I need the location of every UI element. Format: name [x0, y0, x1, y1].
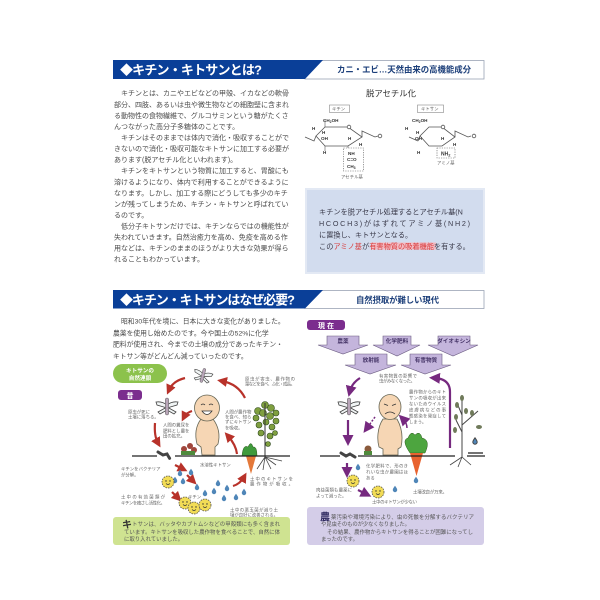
text block: chitin explanation: んつながった高分子多糖体のことです。 [114, 122, 239, 131]
figure: smiling person [194, 395, 220, 455]
chemical diagram: deacetylation: H [405, 126, 409, 131]
text block: change since showa 30: 肥料が使用され、今までの土壌の成分であったキチン・ [113, 340, 283, 348]
small captions: past cycle: を吸収。 [225, 424, 243, 432]
heading bar: what is chitin chitosan [113, 60, 484, 79]
label: natural chain pill [113, 364, 167, 383]
figure: sad person [378, 394, 402, 455]
callout: purple note: その結果、農作物からキトサンを得ることが困難になってし [327, 528, 473, 536]
icon: dragonfly [338, 398, 360, 415]
chemical diagram: deacetylation: アミノ基 [437, 160, 455, 166]
icon: flower and chitin chain [158, 443, 197, 459]
label: natural chain pill: キトサンの [126, 368, 154, 374]
small captions: past cycle: キチンを癒さし活性化。 [121, 500, 165, 506]
text block: chitin explanation: るのです。 [114, 212, 148, 220]
chemical diagram: deacetylation: 2 [330, 120, 332, 124]
illustration: green plant and carrot [242, 402, 282, 474]
small captions: past cycle: 水溶性キトサン [200, 462, 231, 468]
heading bar: what is chitin chitosan: カニ・エビ…天然由来の高機能成分 [337, 64, 472, 74]
chemical diagram: deacetylation: CH [412, 118, 419, 123]
callout: purple note: 薬汚染や環境汚染により、虫の死骸を分解するバクテリア [331, 513, 474, 521]
small captions: past cycle: 葉などを食べ、ふ化・成長。 [245, 380, 295, 388]
text block: chitin explanation: キチンはそのままでは体内で消化・吸収することがで [121, 133, 289, 142]
panel: why chitin is needed [113, 290, 485, 545]
small captions: past cycle: 肥料とし農を [163, 428, 189, 434]
label: natural chain pill: 自然連鎖 [129, 374, 152, 382]
text block: chitin explanation: ンが残ってしまうため、キチン・キトサンと呼ばれてい [114, 199, 288, 208]
text block: chitin explanation: 部分、四肢、あるいは虫や微生物などの細胞壁に含まれ [114, 100, 289, 109]
text block: chitin explanation: きないので消化・吸収可能なキトサンに加工する必要が [114, 144, 289, 153]
small captions: present [316, 372, 447, 506]
small captions: present: れいな虫か農園はほ [366, 468, 409, 476]
small captions: past cycle: ずにキトサン [225, 418, 252, 426]
chemical diagram: deacetylation: H [323, 150, 327, 155]
small captions: past cycle: 壌が良好に改善される。 [230, 512, 278, 518]
icon: yellow bacteria [162, 476, 211, 514]
flow arrows: pollutants: ダイオキシン [437, 337, 471, 345]
flow arrows: pollutants: 農薬 [337, 337, 349, 345]
chemical diagram: deacetylation: NH [348, 151, 355, 156]
small captions: past cycle: が分解。 [121, 472, 139, 478]
small captions: present: サンの吸収が出来 [409, 394, 447, 402]
callout: chitosan amino group: キチンを脱アセチル処理するとアセチル基(N [319, 208, 463, 216]
chemical diagram: deacetylation: 2 [448, 152, 451, 158]
small captions: past cycle: 原虫が害虫、農作物の [245, 376, 295, 382]
chemical diagram: deacetylation: 3 [354, 166, 356, 170]
small captions: past cycle: 土中のキトサンを [250, 476, 293, 482]
text block: chitin explanation [114, 89, 289, 264]
icon: water drops [173, 469, 246, 501]
heading bar: why needed [113, 290, 484, 308]
small captions: past cycle: 人間が農作物 [225, 408, 252, 416]
chemical diagram: deacetylation: H [417, 150, 421, 155]
small captions: past cycle: キチン [188, 494, 202, 500]
chemical diagram: deacetylation: OH [332, 118, 339, 123]
label: present tag: 現 在 [318, 321, 334, 330]
chemical diagram: deacetylation: 2 [419, 120, 421, 124]
flow arrows: pollutants: 放射能 [363, 356, 380, 364]
chemical diagram: deacetylation: H [348, 136, 352, 141]
chemical diagram: deacetylation: H [441, 136, 445, 141]
small captions: present: しまう。 [409, 420, 426, 426]
small captions: present: ある [366, 476, 375, 482]
small captions: past cycle: 土中の悪玉菌が減り土 [230, 506, 279, 514]
callout: purple note: 農 [320, 510, 330, 524]
text block: chitin explanation: 溶けるようになり、体内で利用することができるように [114, 177, 289, 186]
small captions: present: 肉益菌類も農薬に [316, 486, 352, 494]
small captions: present: 土中のキトサンが少ない [372, 498, 418, 506]
small captions: past cycle: 土壌に落ちる。 [128, 414, 159, 420]
heading bar: why needed: ◆キチン・キトサンはなぜ必要? [120, 292, 295, 308]
small captions: past cycle: 原虫が死に [128, 408, 150, 416]
text block: chitin explanation: れることもわかっています。 [114, 256, 204, 264]
illustration: past natural cycle [113, 364, 295, 518]
callout: chitosan amino group [306, 189, 484, 273]
icon: flower and chitin chain [341, 446, 372, 457]
text block: chitin explanation: 低分子キトサンだけでは、キチンならではの機能性が [121, 222, 289, 230]
text block: chitin explanation: る動物性の食物繊維で、グルコサミンという糖がたくさ [114, 111, 289, 120]
heading bar: what is chitin chitosan: ◆キチン・キトサンとは? [120, 62, 262, 78]
small captions: past cycle: 農作物が吸収。 [250, 480, 293, 488]
illustration: carrot [405, 433, 427, 476]
chemical diagram: deacetylation: H [453, 142, 457, 147]
small captions: present: 化学肥料で、形のき [366, 462, 408, 470]
small captions: present: 虫がみなくなった。 [379, 378, 415, 384]
flow arrows: pollutants: 化学肥料 [386, 337, 409, 345]
illustration: present situation [307, 320, 485, 506]
chemical diagram: deacetylation: アセチル基 [341, 174, 363, 180]
chemical diagram: deacetylation: OH [415, 136, 423, 141]
small captions: present: 農作物からのキト [409, 388, 446, 396]
text block: chitin explanation: あります(脱アセチル化といわれます)。 [114, 155, 237, 164]
small captions: past cycle: 土中の有効菌類が [121, 494, 166, 500]
text block: chitin explanation: キチンとは、カニやエビなどの甲殻、イカなどの軟骨 [121, 89, 289, 98]
callout: purple note: や昆虫そのものが少なくなりました。 [321, 520, 410, 528]
small captions: present: 皮膚病などの事 [409, 406, 447, 414]
chemical diagram: deacetylation: H [359, 142, 363, 147]
text block: chitin explanation: 用などは、キチンのままのほうがより大きな効果が得ら [114, 244, 289, 253]
text block: change since showa 30 [113, 316, 285, 360]
text block: chitin explanation: 失われていきます。自然治癒力を高め、免疫を高める作 [114, 233, 288, 242]
illustration: bare tree [450, 395, 483, 467]
callout: green note: トサンは、バッタやカブトムシなどの甲殻類にも多く含まれ [132, 520, 281, 528]
text block: chitin explanation: キチンをキトサンという物質に加工すると、胃酸にも [121, 166, 289, 175]
small captions: past cycle: を食べ、知ら [225, 414, 251, 420]
callout: chitosan amino group: HCOCH3)がはずれてアミノ基(NH2) [319, 219, 470, 228]
chemical diagram: deacetylation: H [322, 130, 326, 135]
small captions: present: よって減った。 [316, 492, 346, 500]
small captions: past cycle: キチンをバクテリア [121, 466, 161, 472]
chemical diagram: deacetylation: CH [323, 118, 330, 123]
chemical diagram: deacetylation: NH [441, 152, 448, 158]
heading bar: why needed: 自然摂取が難しい現代 [356, 295, 440, 305]
callout: chitosan amino group: このアミノ基が有害物質の吸着機能を有する。 [319, 242, 470, 251]
arrows: purple [347, 378, 450, 494]
callout: chitosan amino group: に置換し、キトサンとなる。 [319, 230, 412, 240]
ground line [132, 455, 290, 457]
small captions: present: 有害物質の影響で [379, 372, 418, 380]
text block: change since showa 30: キトサン等がどんどん減っていったのです。 [113, 352, 248, 360]
text block: chitin explanation: なります。しかし、加工する際にどうしても多少のキチ [114, 188, 288, 197]
chemical diagram: deacetylation: OH [321, 136, 329, 141]
icon: dragonflies [156, 366, 214, 415]
chemical diagram: deacetylation: キトサン [421, 106, 439, 112]
callout: green note: ています。キトサンを吸収した農作物を食べることで、自然に体 [124, 528, 281, 536]
callout: purple note [307, 507, 484, 545]
callout: purple note: まったのです。 [321, 536, 358, 543]
chemical diagram: deacetylation: OH [421, 118, 428, 123]
callout: green note [113, 517, 290, 545]
chemical diagram: deacetylation: CH [347, 164, 354, 169]
panel: what is chitin [113, 60, 484, 273]
ground line [320, 455, 485, 457]
small captions: past cycle: 田の拡充。 [163, 432, 185, 440]
callout: green note: に取り入れていました。 [124, 536, 183, 543]
chemical diagram: deacetylation: H [312, 126, 316, 131]
chemical diagram: deacetylation: 脱アセチル化 [366, 88, 417, 98]
chemical diagram: deacetylation: キチン [332, 106, 346, 112]
chemical diagram: deacetylation: H [416, 130, 420, 135]
flow arrows: pollutants: 有害物質 [415, 356, 438, 364]
small captions: present: ないためウイルス [409, 400, 446, 408]
flow arrows: pollutants [318, 336, 478, 374]
small captions: present: 態感染を発症して [409, 412, 446, 420]
callout: green note: キ [122, 520, 132, 531]
label: present tag [307, 320, 345, 330]
chemical diagram: deacetylation [305, 88, 476, 180]
chemical diagram: deacetylation: C=O [347, 157, 357, 162]
small captions: past cycle: 人間の糞尿を [163, 422, 189, 428]
small captions: past cycle [121, 376, 295, 518]
icon: drops and bacteria [347, 464, 418, 498]
label: past tag [118, 390, 142, 400]
text block: change since showa 30: 農薬を使用し始めたのです。今や国土の52%に化学 [113, 328, 269, 338]
arrows: red cycle [155, 378, 245, 498]
text block: change since showa 30: 昭和30年代を境に、日本に大きな変化がありました。 [121, 316, 285, 326]
label: past tag: 昔 [126, 392, 134, 400]
small captions: present: 土壌改良が万来。 [413, 488, 447, 496]
